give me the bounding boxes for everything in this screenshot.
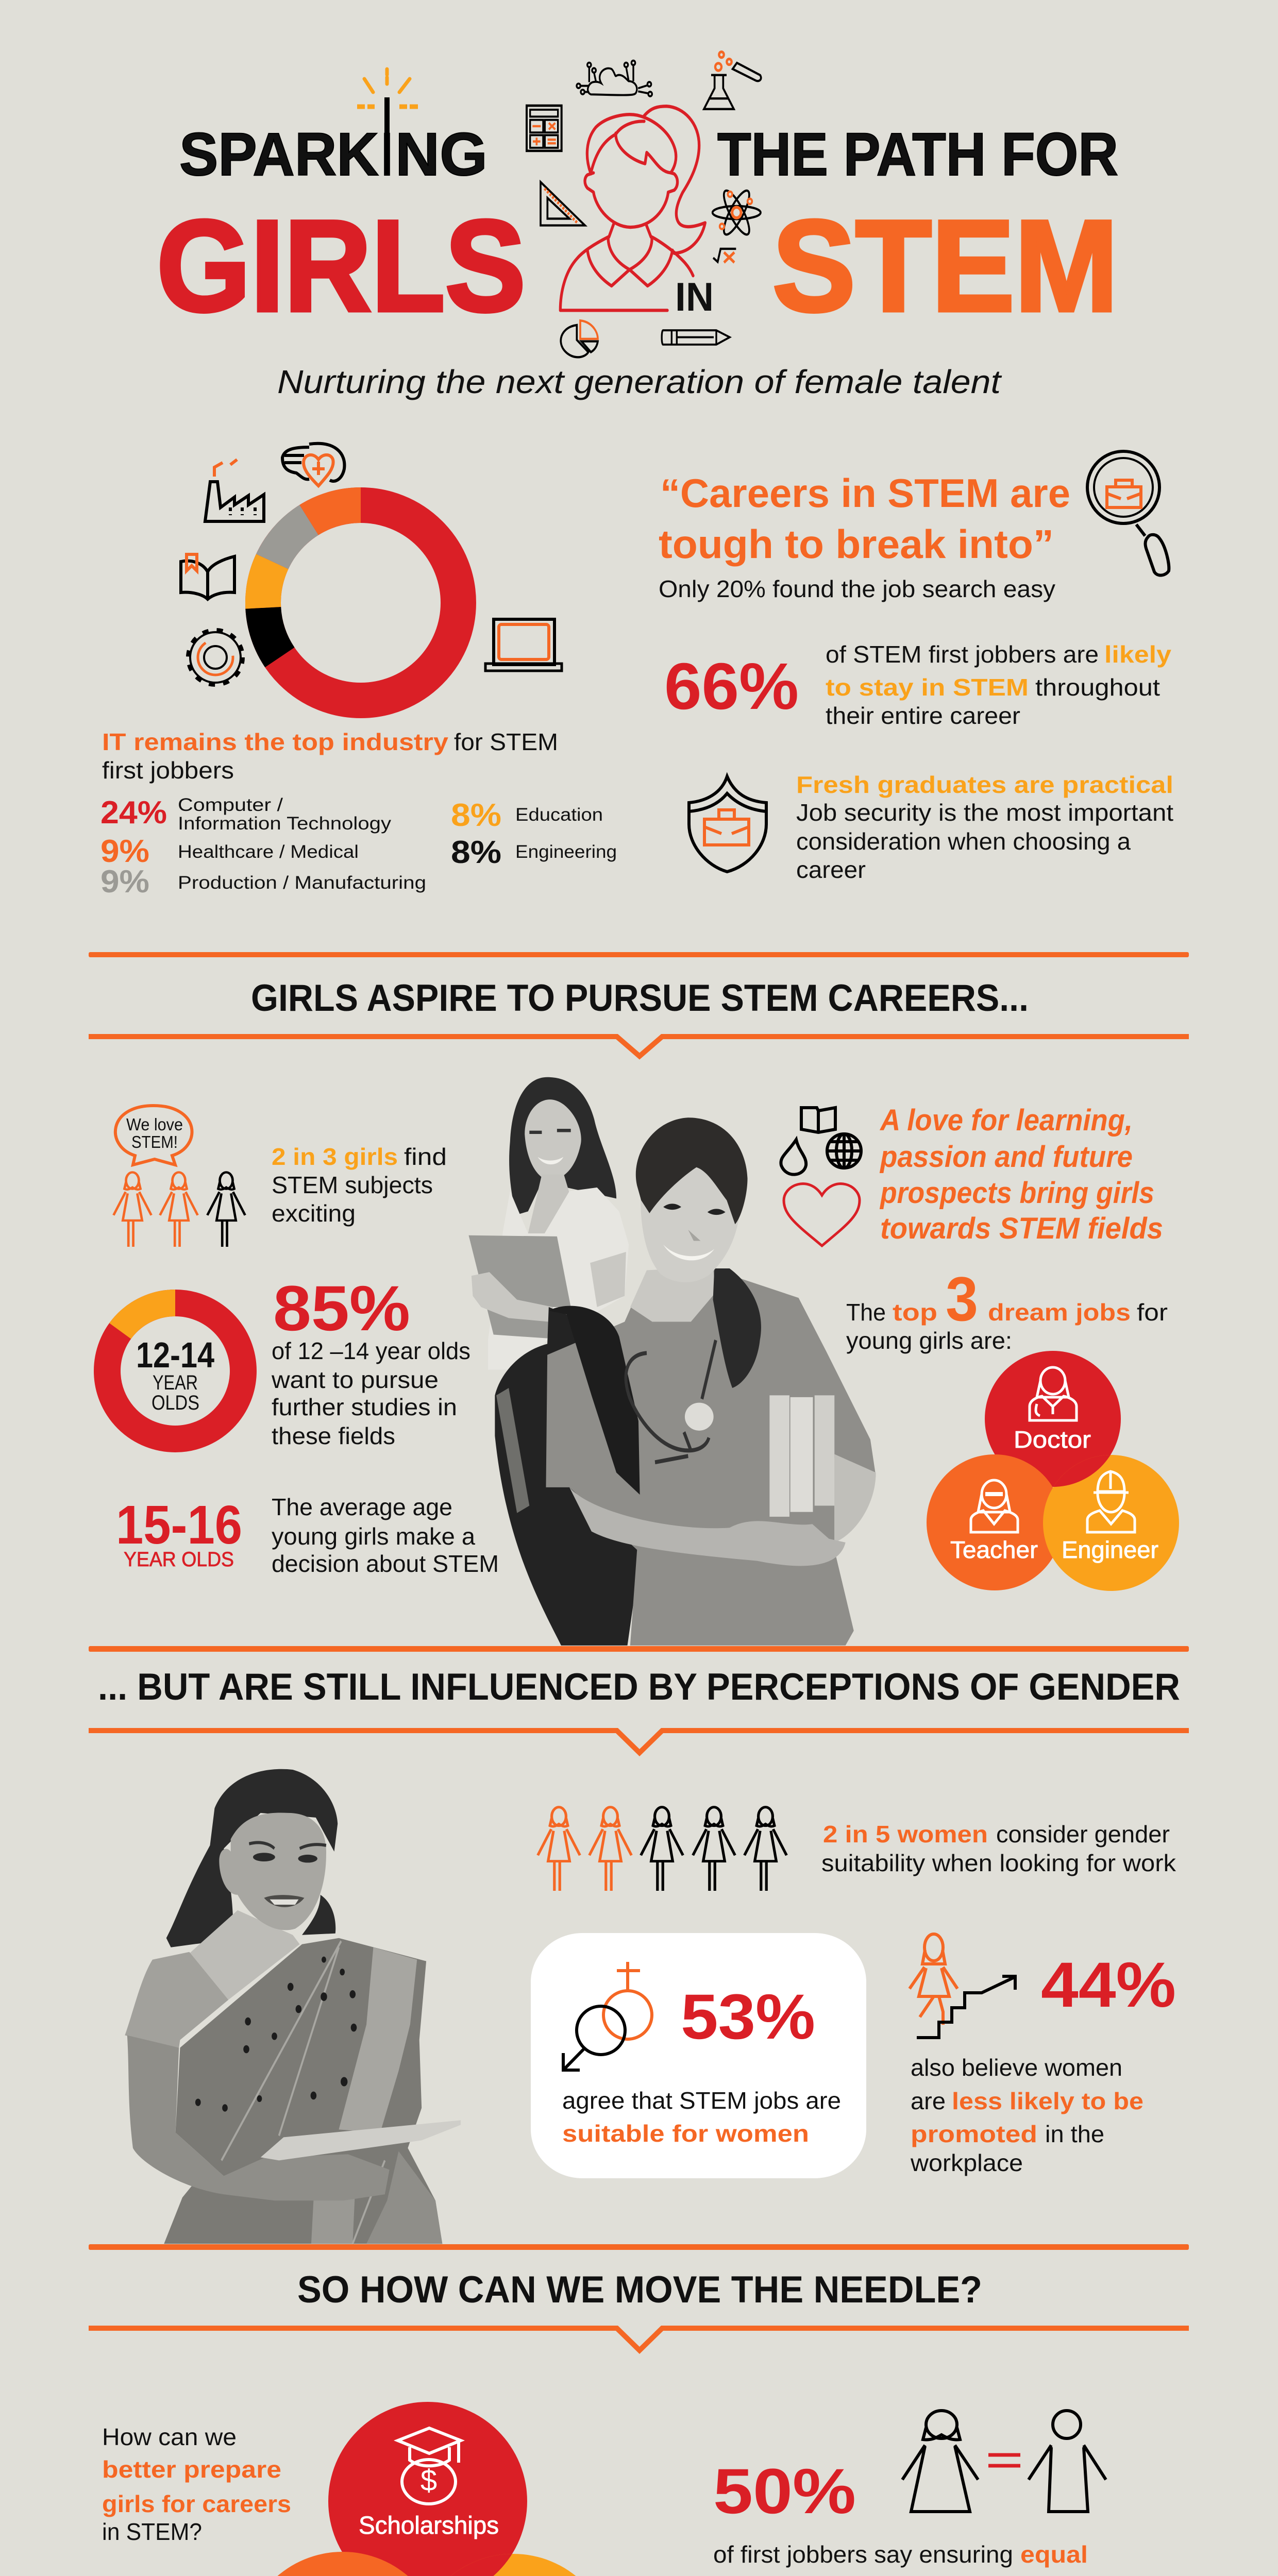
icon: factory <box>205 460 264 521</box>
label: teacher: Teacher <box>950 1536 1038 1563</box>
panel: industries <box>100 444 617 900</box>
text: average age: decision about STEM <box>272 1550 499 1577</box>
text: better prepare <box>102 2424 291 2545</box>
icon: girl outline and STEM doodles <box>527 52 761 357</box>
text: less likely to be promoted: also believe women <box>911 2054 1122 2081</box>
icon: engineer <box>1087 1471 1135 1532</box>
text: suitable for women: agree that STEM jobs are <box>562 2087 841 2114</box>
icon: hand with heart <box>282 444 344 486</box>
icon: three girls <box>113 1172 245 1247</box>
text: a love for learning <box>879 1104 1163 1245</box>
icon: book <box>181 554 234 599</box>
card: 53%: suitable for women <box>562 2120 809 2147</box>
legend: 9% production <box>100 864 426 900</box>
text: 12-14 year olds: these fields <box>272 1422 395 1449</box>
title: stem: STEM <box>772 194 1118 338</box>
icon: atom <box>713 187 761 238</box>
icon: pie chart <box>561 320 598 357</box>
text: fresh graduates: career <box>796 856 866 883</box>
text: IT remains the top industry: IT remains the top industry <box>102 728 448 755</box>
donut chart: 85% <box>107 1303 243 1439</box>
legend: 24% computer: Computer / <box>178 795 283 815</box>
section header: move the needle <box>89 2244 1189 2350</box>
icon: gender symbols <box>563 1962 652 2070</box>
icon: book, flame, globe, heart <box>781 1108 861 1246</box>
heading: perceptions of gender: ... BUT ARE STILL INFLUENCED BY PERCEPTIONS OF GENDER <box>98 1666 1180 1708</box>
text: 12-14 year olds <box>271 1337 470 1449</box>
legend: 9% production: Production / Manufacturing <box>178 873 426 893</box>
legend: 9% healthcare: Healthcare / Medical <box>178 842 359 862</box>
photo: backpack <box>495 1307 641 1646</box>
text: likely to stay: to stay in STEM <box>826 674 1029 701</box>
text: top 3 dream jobs: young girls are: <box>846 1327 1012 1354</box>
heading: move the needle: SO HOW CAN WE MOVE THE NEEDLE? <box>297 2269 982 2311</box>
panel: girls aspire left <box>107 1106 499 1577</box>
text: IT remains the top industry: first jobbers <box>102 757 234 784</box>
text: top 3 dream jobs: The <box>846 1299 886 1326</box>
text: IT remains the top industry: for STEM <box>454 728 558 755</box>
text: average age <box>272 1494 499 1577</box>
legend: 8% engineering: Engineering <box>515 842 617 862</box>
venn: dream jobs <box>927 1351 1179 1591</box>
text: less likely to be promoted: are <box>911 2088 946 2114</box>
title: sparking: I <box>382 121 392 189</box>
photo: two students <box>468 1077 876 1646</box>
icon: gear <box>188 630 243 685</box>
icon: doctor <box>1030 1367 1077 1420</box>
legend: 8% education: 8% <box>451 798 501 833</box>
text: a love for learning: towards STEM fields <box>880 1212 1163 1245</box>
stat: 44%: 44% <box>1041 1950 1176 2021</box>
section header: perceptions of gender <box>89 1646 1189 1753</box>
text: better prepare: How can we <box>102 2424 237 2450</box>
icon: square root <box>713 249 736 262</box>
icon: flask <box>704 52 761 109</box>
icon: woman climbing stairs <box>910 1934 1015 2038</box>
stat: 53%: 53% <box>681 1981 815 2053</box>
text: less likely to be promoted: promoted <box>911 2121 1037 2147</box>
text: likely to stay: their entire career <box>826 702 1020 729</box>
text: 2 in 5 women: suitability when looking for work <box>821 1850 1176 1876</box>
title block <box>157 52 1118 400</box>
stat: 15-16 year olds: 15-16 <box>116 1495 242 1555</box>
stat: 85%: 85% <box>273 1273 410 1344</box>
text: better prepare: in STEM? <box>102 2518 202 2545</box>
text: 12-14 year olds: want to pursue <box>271 1366 439 1393</box>
label: scholarships: Scholarships <box>359 2512 499 2539</box>
donut chart: industries <box>263 505 459 701</box>
icon: woman equals man <box>902 2411 1106 2512</box>
panel: first jobbers findings <box>659 451 1173 883</box>
quote: “Careers in STEM are <box>660 470 1070 516</box>
section header: girls aspire <box>89 952 1189 1056</box>
icon: girl outline <box>560 106 705 310</box>
venn: preparation <box>277 2402 576 2576</box>
icon: speech bubble: STEM! <box>131 1132 178 1151</box>
text: better prepare: girls for careers <box>102 2490 291 2517</box>
icon: magnifier with briefcase <box>1087 451 1169 575</box>
photo: student with folder <box>468 1077 629 1369</box>
text: a love for learning: prospects bring girls <box>879 1176 1154 1210</box>
heading: girls aspire: GIRLS ASPIRE TO PURSUE STEM CAREERS... <box>251 977 1029 1019</box>
panel: girls aspire right <box>781 1104 1179 1591</box>
donut chart: 85%: OLDS <box>152 1392 199 1414</box>
title: the path for: THE PATH FOR <box>717 121 1118 189</box>
donut chart: 85%: YEAR <box>153 1371 198 1394</box>
panel: better prepare <box>102 2402 613 2576</box>
quote <box>659 470 1070 567</box>
text: average age: The average age <box>272 1494 452 1520</box>
text: less likely to be promoted <box>910 2054 1144 2176</box>
text: 12-14 year olds: of 12 –14 year olds <box>272 1337 470 1364</box>
icon: spark above the I <box>357 69 418 176</box>
text: IT remains the top industry <box>102 728 558 784</box>
stat: 15-16 year olds: YEAR OLDS <box>124 1548 234 1571</box>
text: a love for learning: passion and future <box>879 1140 1133 1174</box>
quote: tough to break into” <box>659 521 1054 567</box>
text: less likely to be promoted: less likely to be <box>952 2088 1144 2114</box>
text: equal opportunities: equal <box>1020 2541 1088 2568</box>
photo: woman in sari <box>125 1769 461 2244</box>
legend: 9% healthcare: 9% <box>100 834 149 869</box>
text: 2 in 3 girls: STEM subjects <box>272 1172 433 1198</box>
text: less likely to be promoted: in the <box>1045 2121 1104 2147</box>
text: only 20%: Only 20% found the job search easy <box>659 575 1055 602</box>
icon: cloud network <box>577 61 652 96</box>
icon: shield with briefcase <box>689 776 766 872</box>
text: likely to stay: of STEM first jobbers are <box>826 641 1099 668</box>
text: top 3 dream jobs: top <box>893 1299 937 1326</box>
card: 53% <box>531 1933 866 2178</box>
text: equal opportunities: of first jobbers say ensuring <box>713 2541 1013 2568</box>
text: 2 in 3 girls: 2 in 3 girls <box>272 1143 398 1170</box>
text: top 3 dream jobs <box>846 1264 1168 1354</box>
title: girls: GIRLS <box>157 194 526 338</box>
title: in: IN <box>675 274 714 319</box>
stat: 50%: 50% <box>713 2456 856 2527</box>
icon: set square <box>541 182 585 226</box>
icon: speech bubble <box>115 1106 192 1165</box>
text: 12-14 year olds: further studies in <box>272 1394 457 1420</box>
icon: calculator <box>527 106 562 151</box>
legend: 24% computer: 24% <box>100 795 167 831</box>
text: top 3 dream jobs: for <box>1137 1299 1168 1326</box>
text: average age: young girls make a <box>272 1523 475 1550</box>
text: likely to stay: likely <box>1104 641 1171 668</box>
icon: graduation cap with money bag: $ <box>421 2464 437 2497</box>
title: sparking: NG <box>395 121 487 189</box>
subtitle: Nurturing the next generation of female talent <box>277 363 1002 400</box>
photo: nurse <box>546 1117 876 1646</box>
text: likely to stay: throughout <box>1035 674 1160 701</box>
text: fresh graduates <box>796 771 1173 883</box>
legend: 24% computer: Information Technology <box>178 814 392 834</box>
legend: 8% education: Education <box>515 805 603 825</box>
text: better prepare: better prepare <box>102 2456 281 2483</box>
text: 2 in 3 girls <box>272 1143 447 1227</box>
legend: 24% computer <box>100 795 392 834</box>
stat: 66%: 66% <box>664 650 799 723</box>
text: top 3 dream jobs: 3 <box>946 1264 978 1334</box>
text: 2 in 3 girls: find <box>404 1143 447 1170</box>
text: 2 in 5 women: 2 in 5 women <box>823 1821 988 1848</box>
text: fresh graduates: Job security is the most important <box>796 799 1173 826</box>
text: fresh graduates: Fresh graduates are practical <box>796 771 1173 798</box>
icon: graduation cap with money bag <box>398 2428 461 2504</box>
text: top 3 dream jobs: dream jobs <box>988 1299 1131 1326</box>
text: equal opportunities <box>713 2541 1131 2576</box>
icon: five women <box>538 1807 786 1891</box>
donut chart: 85%: 12-14 <box>136 1335 214 1375</box>
text: likely to stay <box>826 641 1171 729</box>
label: engineer: Engineer <box>1062 1536 1158 1563</box>
text: less likely to be promoted: workplace <box>910 2149 1023 2176</box>
text: 2 in 3 girls: exciting <box>272 1200 356 1227</box>
text: fresh graduates: consideration when choosing a <box>796 828 1131 855</box>
icon: teacher <box>971 1480 1018 1532</box>
legend: 9% healthcare <box>100 834 359 869</box>
legend: 8% engineering <box>451 835 617 870</box>
text: a love for learning: A love for learning, <box>879 1104 1133 1137</box>
icon: pencil <box>662 330 730 345</box>
icon: speech bubble: We love <box>126 1115 183 1134</box>
label: doctor: Doctor <box>1014 1426 1091 1453</box>
panel: equal employment <box>713 2411 1131 2576</box>
legend: 9% production: 9% <box>100 864 149 900</box>
panel: perceptions <box>531 1807 1176 2178</box>
text: 2 in 5 women <box>821 1821 1176 1876</box>
text: 2 in 5 women: consider gender <box>996 1821 1170 1848</box>
legend: 8% education <box>451 798 603 833</box>
title: sparking: SPARK <box>179 121 379 189</box>
legend: 8% engineering: 8% <box>451 835 501 870</box>
icon: laptop <box>485 619 562 671</box>
